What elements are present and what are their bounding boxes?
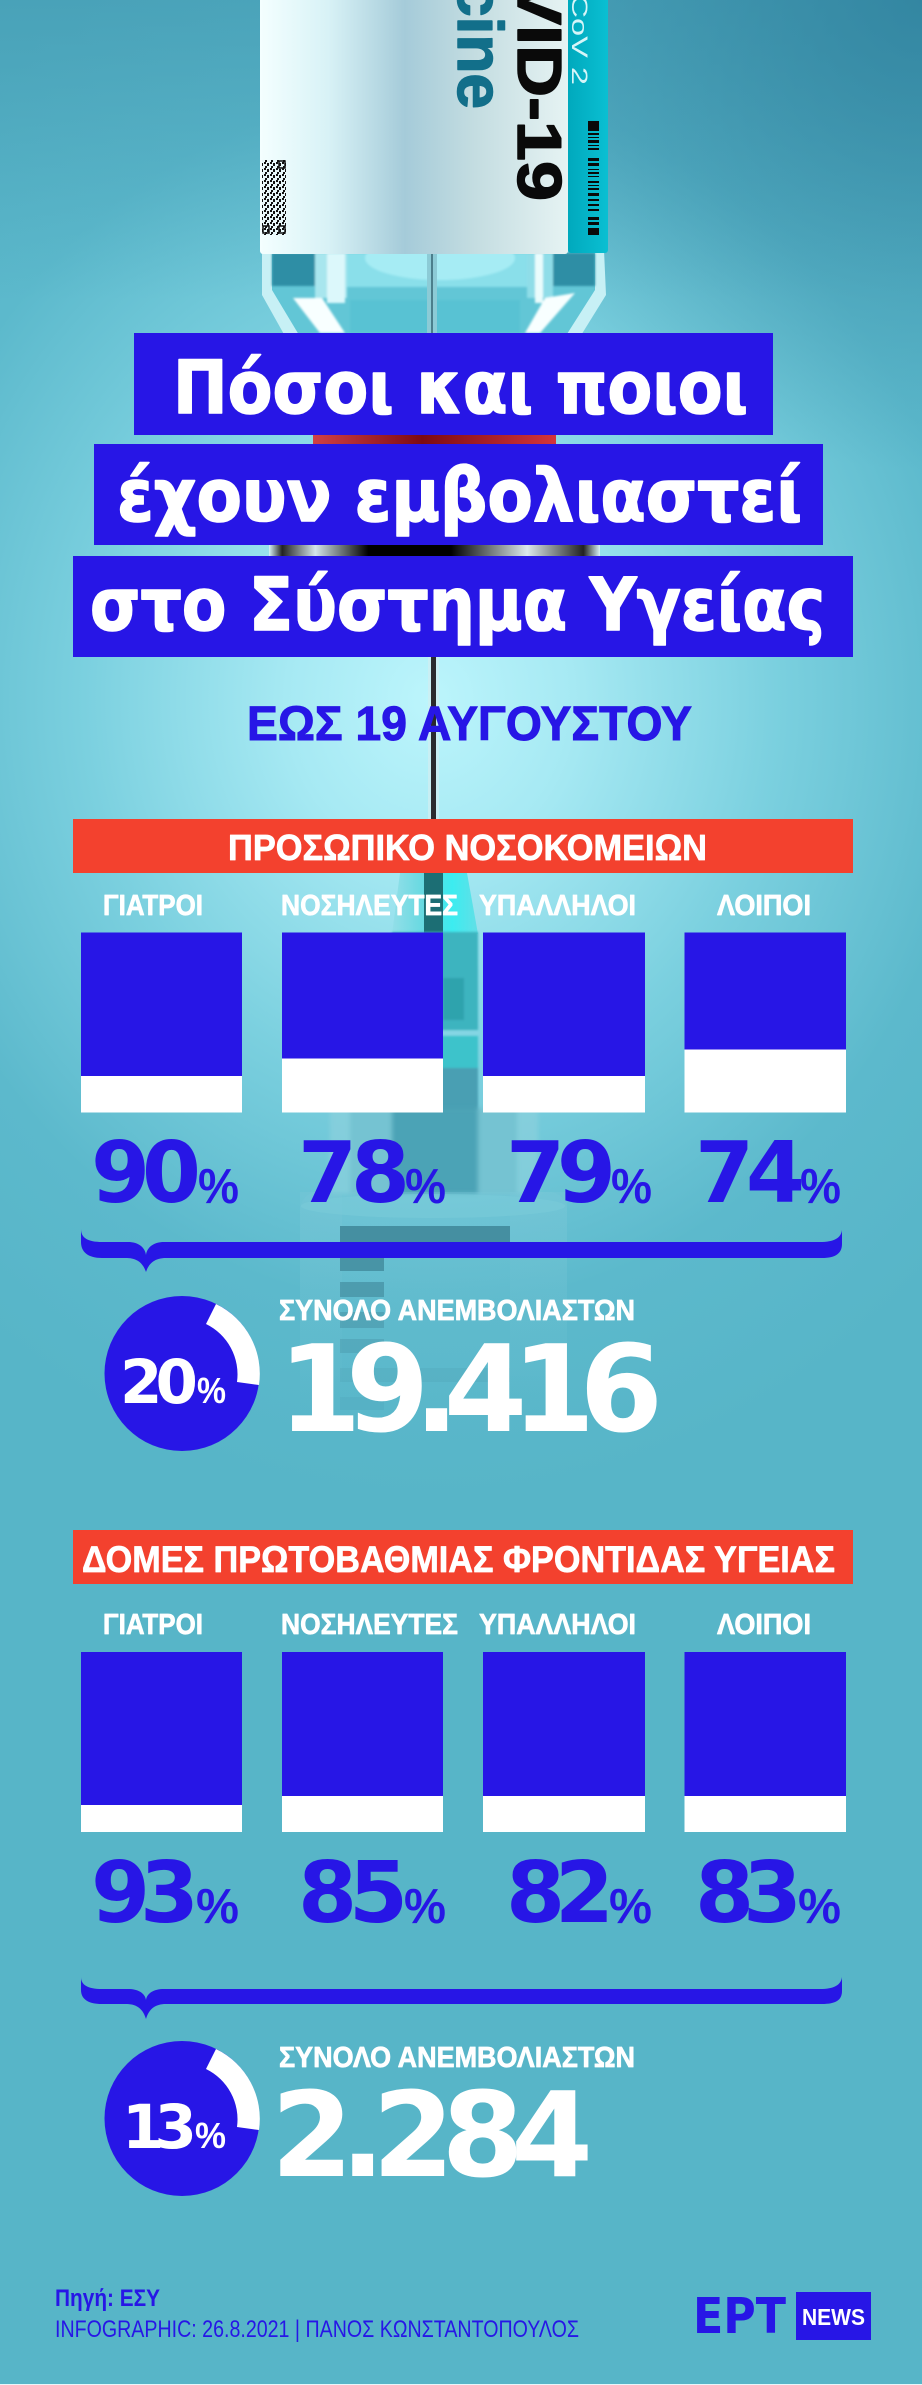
barcode [588, 121, 599, 235]
donut: 13% [104, 2041, 260, 2196]
donut: 20%: 20 [120, 1347, 198, 1418]
percentages: 83 [695, 1844, 802, 1943]
column labels [103, 1609, 811, 1641]
syringe barrel [300, 1192, 567, 1432]
bar chart: vaccination share [81, 932, 846, 1112]
percentages: 90 [91, 1124, 201, 1223]
footer: credits: INFOGRAPHIC: 26.8.2021 | ΠΑΝΟΣ ΚΩΝΣΤΑΝΤΟΠΟΥΛΟΣ [55, 2316, 579, 2343]
percentages: % [798, 1880, 841, 1934]
QR code [262, 160, 286, 235]
footer: source: Πηγή: ΕΣΥ [55, 2285, 160, 2312]
percentages: % [611, 1160, 652, 1214]
panel: hospital staff [73, 819, 853, 1460]
subtitle: ΕΩΣ 19 ΑΥΓΟΥΣΤΟΥ [247, 698, 692, 751]
logo news box [796, 2292, 871, 2340]
donut: 20%: % [197, 1370, 226, 1411]
section heading: ΠΡΟΣΩΠΙΚΟ ΝΟΣΟΚΟΜΕΙΩΝ [228, 827, 707, 868]
donut: 20% [104, 1296, 260, 1451]
syringe cone [392, 873, 478, 934]
column labels: ΛΟΙΠΟΙ [717, 1609, 811, 1641]
total label: ΣΥΝΟΛΟ ΑΝΕΜΒΟΛΙΑΣΤΩΝ [279, 2042, 635, 2074]
bar chart: vaccination share [81, 1652, 846, 1832]
illustration: vaccine vial [260, 0, 608, 875]
percentages: % [196, 1880, 239, 1934]
percentages: 93 [91, 1844, 199, 1943]
brace [81, 1229, 842, 1272]
column labels [103, 890, 811, 922]
percentages: % [404, 1880, 446, 1934]
title line 2: έχουν εμβολιαστεί [117, 454, 802, 539]
percentages: 74 [695, 1124, 805, 1223]
column labels: ΝΟΣΗΛΕΥΤΕΣ [281, 890, 458, 922]
vial label [260, 0, 608, 254]
donut: 13%: % [195, 2115, 226, 2156]
black cap band [269, 540, 600, 560]
percentages: % [609, 1880, 652, 1934]
percentages: 78 [298, 1124, 410, 1223]
title line 3: στο Σύστημα Υγείας [90, 563, 825, 648]
illustration: faded syringe [300, 873, 567, 1432]
title [73, 333, 853, 657]
section heading: ΔΟΜΕΣ ΠΡΩΤΟΒΑΘΜΙΑΣ ΦΡΟΝΤΙΔΑΣ ΥΓΕΙΑΣ [82, 1539, 835, 1580]
column labels: ΓΙΑΤΡΟΙ [103, 890, 203, 922]
percentages: 79 [506, 1124, 616, 1223]
logo: ERT News [693, 2288, 871, 2345]
syringe body upper [392, 932, 478, 1112]
donut: 13%: 13 [122, 2092, 197, 2163]
total number: 2.284 [271, 2066, 593, 2204]
column labels: ΛΟΙΠΟΙ [717, 890, 811, 922]
column labels: ΥΠΑΛΛΗΛΟΙ [479, 1609, 636, 1641]
panel: primary care [73, 1530, 853, 2204]
needle hub [424, 873, 443, 933]
brace [81, 1977, 842, 2019]
percentages: % [405, 1160, 446, 1214]
title line 1: Πόσοι και ποιοι [173, 346, 748, 431]
total label: ΣΥΝΟΛΟ ΑΝΕΜΒΟΛΙΑΣΤΩΝ [279, 1295, 635, 1327]
vial glass neck [262, 236, 606, 345]
syringe body lower [330, 1108, 538, 1194]
section heading [73, 819, 853, 873]
percentages: % [800, 1160, 841, 1214]
red cap band [313, 430, 556, 448]
percentages [91, 1124, 841, 1223]
needle [428, 650, 439, 875]
logo news box: NEWS [802, 2304, 865, 2330]
percentages [91, 1844, 841, 1943]
total number: 19.416 [278, 1321, 663, 1460]
column labels: ΝΟΣΗΛΕΥΤΕΣ [281, 1609, 458, 1641]
percentages: % [198, 1160, 239, 1214]
percentages: 82 [506, 1844, 614, 1943]
column labels: ΓΙΑΤΡΟΙ [103, 1609, 203, 1641]
percentages: 85 [298, 1844, 408, 1943]
logo wordmark: ΕΡΤ [693, 2288, 787, 2345]
column labels: ΥΠΑΛΛΗΛΟΙ [479, 890, 636, 922]
